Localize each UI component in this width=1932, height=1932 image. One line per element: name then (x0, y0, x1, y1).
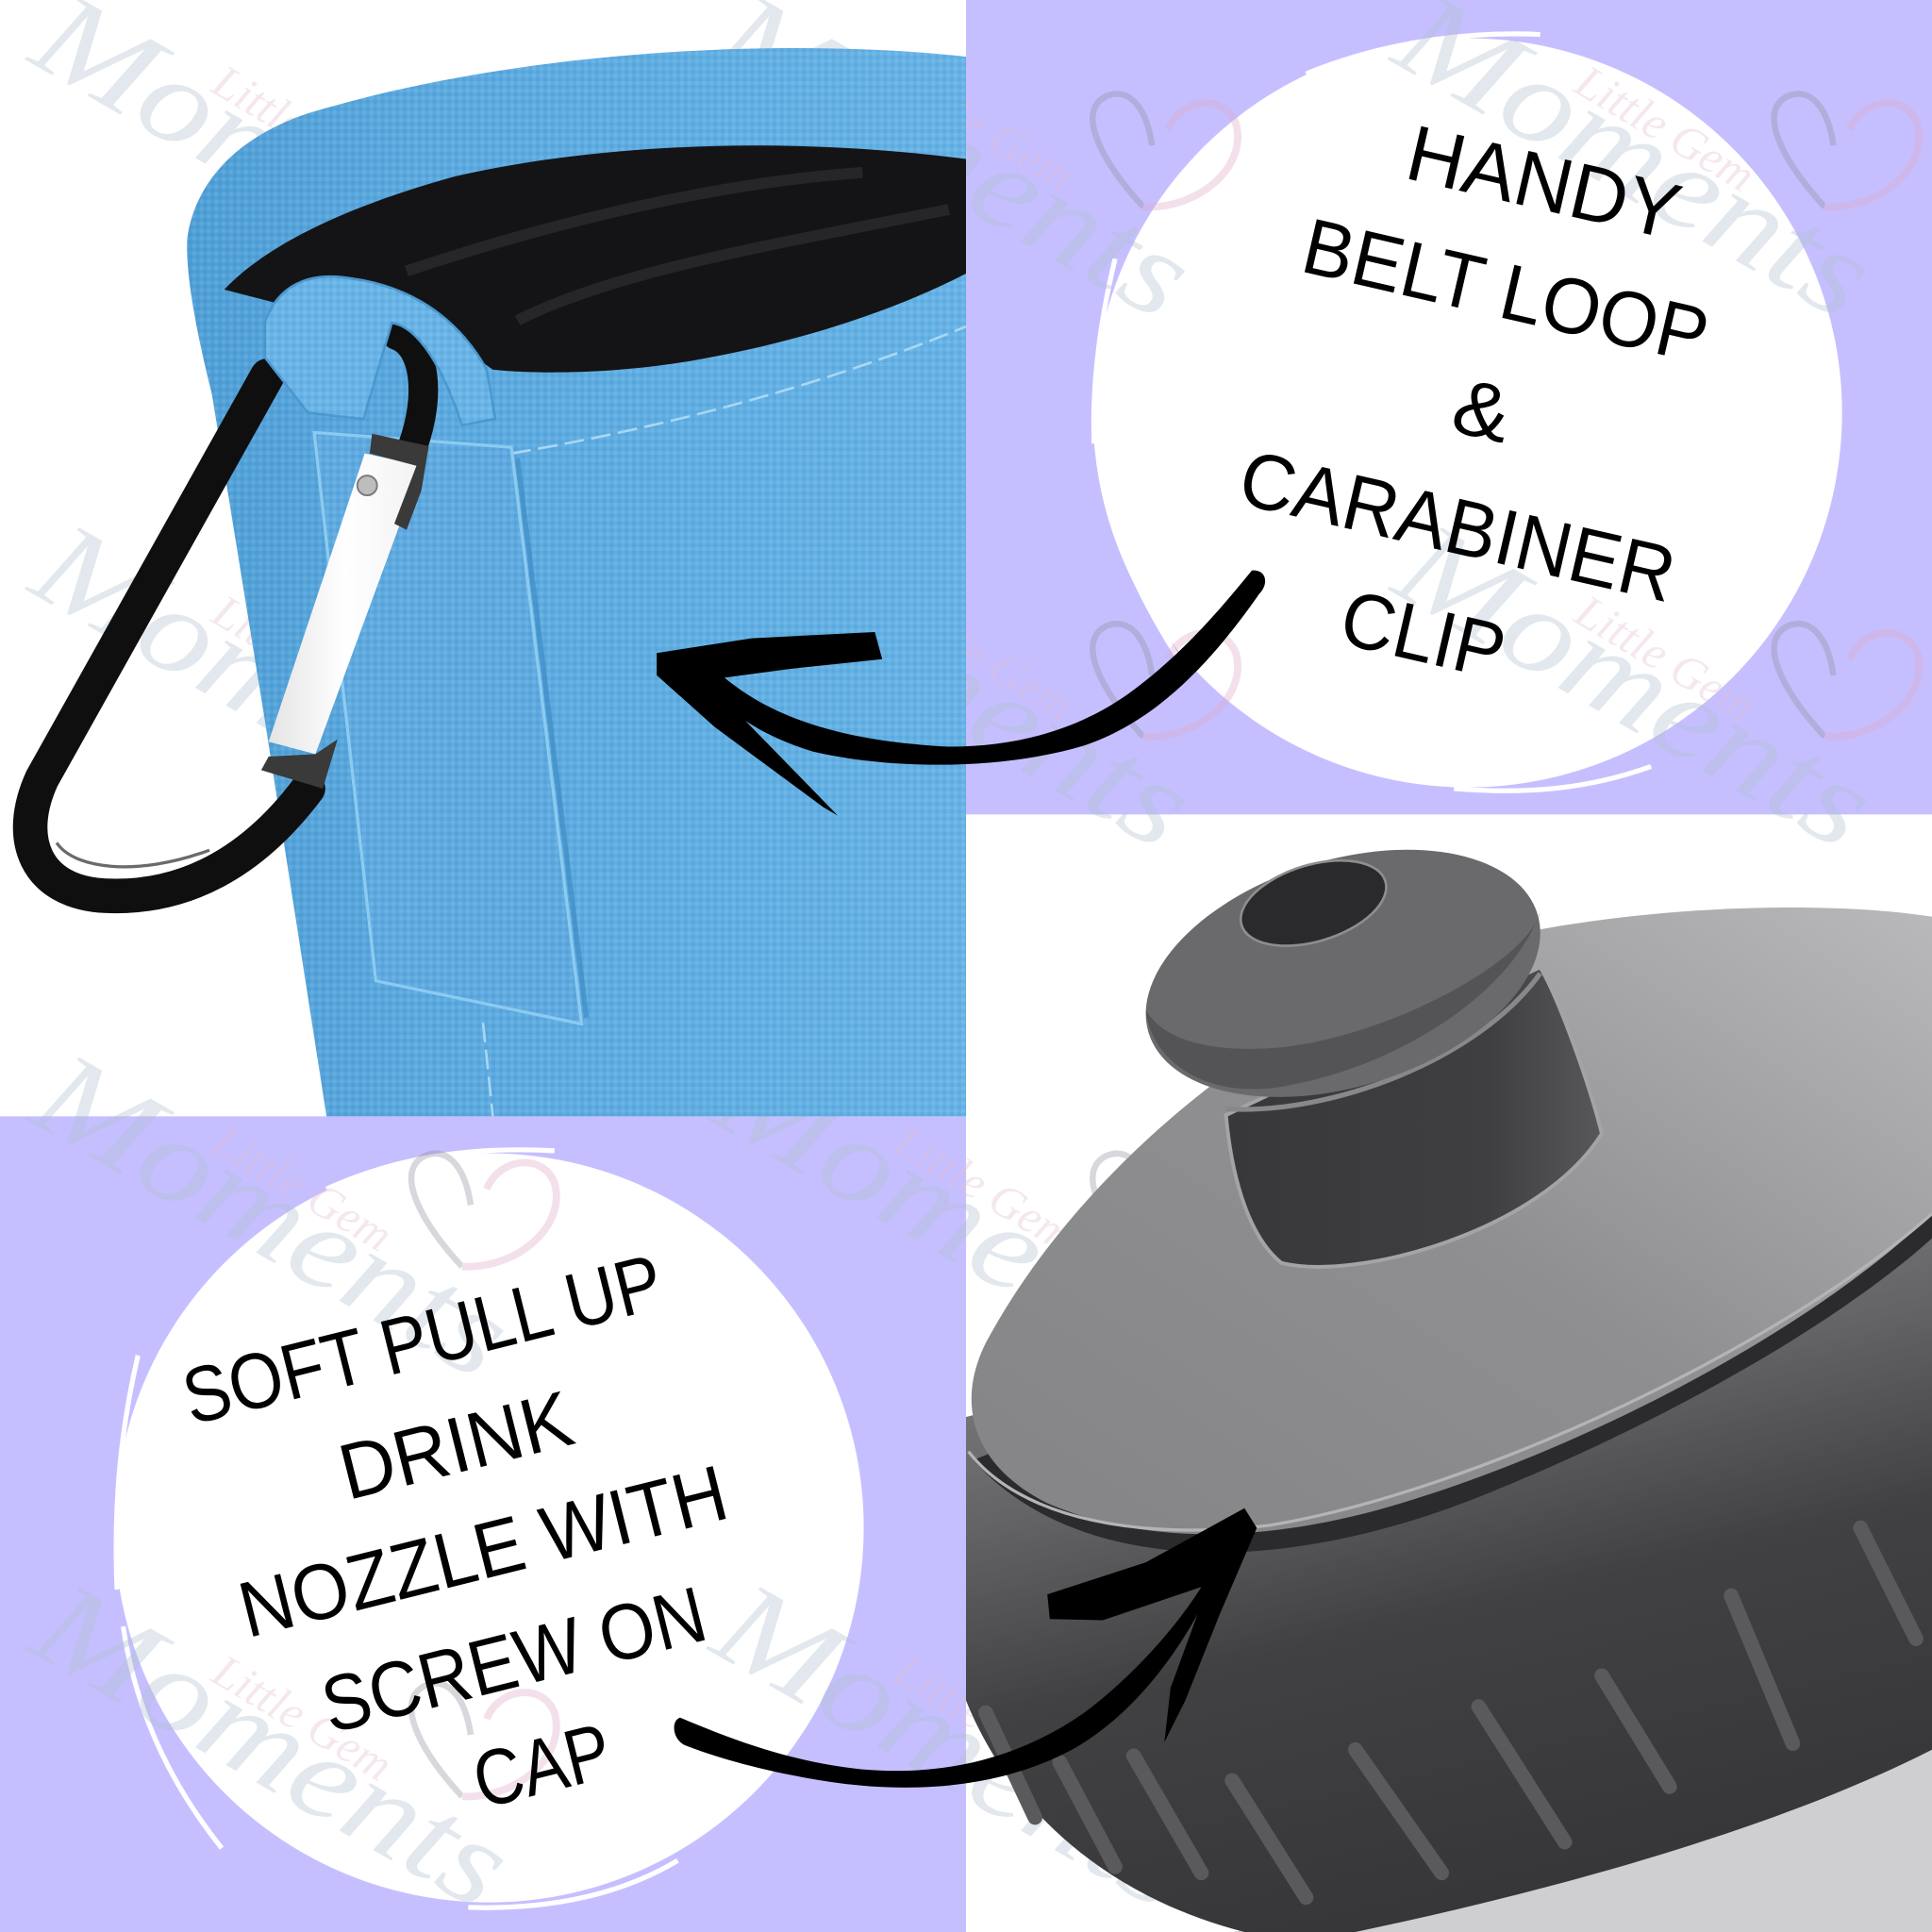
nozzle hole (1230, 844, 1396, 961)
text block: belt loop and carabiner: CLIP (1333, 573, 1513, 696)
carabiner highlight (57, 842, 209, 867)
watermark: Little Gem Moments tiled: Moments (1373, 1555, 1896, 1932)
watermark: Little Gem Moments tiled: Little Gem (1566, 584, 1764, 732)
callout circle: bottom left (114, 1150, 864, 1907)
watermark: Little Gem Moments tiled: Little Gem (885, 55, 1082, 202)
cap ribs (986, 1528, 1916, 1897)
lower bottle light band (1232, 1750, 1932, 1932)
watermark: Little Gem Moments tiled: Little Gem (203, 1114, 401, 1261)
brush edge strokes (1093, 34, 1651, 791)
fabric texture (187, 48, 966, 1116)
gate rivet (358, 475, 377, 495)
text block: drink nozzle and screw cap: SOFT PULL UP (174, 1237, 672, 1441)
disc shadow groove (974, 1183, 1932, 1553)
carabiner black body (30, 375, 308, 896)
photo: blue bottle bag with carabiner (30, 48, 966, 1116)
black bag lining (225, 145, 966, 373)
watermark: Little Gem Moments tiled: Moments (691, 1024, 1215, 1406)
carabiner white gate (269, 454, 422, 754)
carabiner hook (397, 335, 424, 446)
text block: belt loop and carabiner: CARABINER (1232, 433, 1684, 619)
bag body (187, 48, 966, 1116)
text block: drink nozzle and screw cap: SCREW ON (313, 1569, 714, 1750)
nozzle neck (1226, 967, 1602, 1267)
panel: lilac top right (966, 0, 1932, 814)
disc rim highlight (969, 1214, 1932, 1530)
watermark: Little Gem Moments tiled: Moments (691, 1555, 1215, 1932)
watermark: Little Gem Moments tiled: Moments (1373, 495, 1896, 875)
lining sheen (407, 173, 949, 321)
strap loop (265, 276, 495, 425)
panel: lilac bottom left (0, 1116, 966, 1932)
text block: drink nozzle and screw cap: DRINK (330, 1374, 581, 1517)
text block: belt loop and carabiner: & (1444, 360, 1520, 459)
bag seam stitching (483, 326, 966, 1116)
text block: drink nozzle and screw cap: CAP (464, 1706, 620, 1825)
arrow: to screw cap (675, 1508, 1257, 1788)
brush edge strokes (116, 1150, 677, 1907)
watermark: Little Gem Moments tiled: Moments (1373, 1024, 1896, 1406)
watermark: Little Gem Moments tiled: Little Gem (1566, 1114, 1764, 1261)
top disc (972, 908, 1932, 1534)
text block: belt loop and carabiner: BELT LOOP (1294, 201, 1717, 380)
text block: drink nozzle and screw cap: NOZZLE WITH (230, 1448, 736, 1655)
watermark: Little Gem Moments tiled: Little Gem (203, 1644, 401, 1791)
photo: grey sports bottle nozzle cap (966, 806, 1932, 1932)
watermark: Little Gem Moments tiled: Moments (691, 495, 1215, 875)
gate collars (261, 434, 429, 789)
watermark: Little Gem Moments tiled: Moments (10, 1024, 534, 1406)
watermark: Little Gem Moments tiled: Moments (10, 495, 534, 875)
text block: belt loop and carabiner (1232, 108, 1717, 696)
watermark: Little Gem Moments tiled: Little Gem (1566, 55, 1764, 202)
watermark: Little Gem Moments tiled: Little Gem (885, 1644, 1082, 1791)
text block: belt loop and carabiner: HANDY (1399, 108, 1689, 257)
watermark: Little Gem Moments tiled: Little Gem (885, 584, 1082, 732)
arrow: to belt loop (657, 571, 1265, 816)
watermark: Little Gem Moments tiled: Moments (10, 1555, 534, 1932)
nozzle ring (1226, 974, 1541, 1109)
strap tab (314, 432, 581, 1024)
watermark: Little Gem Moments tiled: Little Gem (203, 584, 401, 732)
watermark: Little Gem Moments tiled: Little Gem (885, 1114, 1082, 1261)
text block: drink nozzle and screw cap (174, 1237, 736, 1825)
screw cap body (966, 1183, 1932, 1932)
tab fold shadow (518, 458, 587, 1018)
nozzle mushroom head (1115, 806, 1571, 1141)
watermark: Little Gem Moments tiled: Little Gem (1566, 1644, 1764, 1791)
watermark: Little Gem Moments tiled: Little Gem (203, 55, 401, 202)
callout circle: top right (1093, 34, 1842, 791)
